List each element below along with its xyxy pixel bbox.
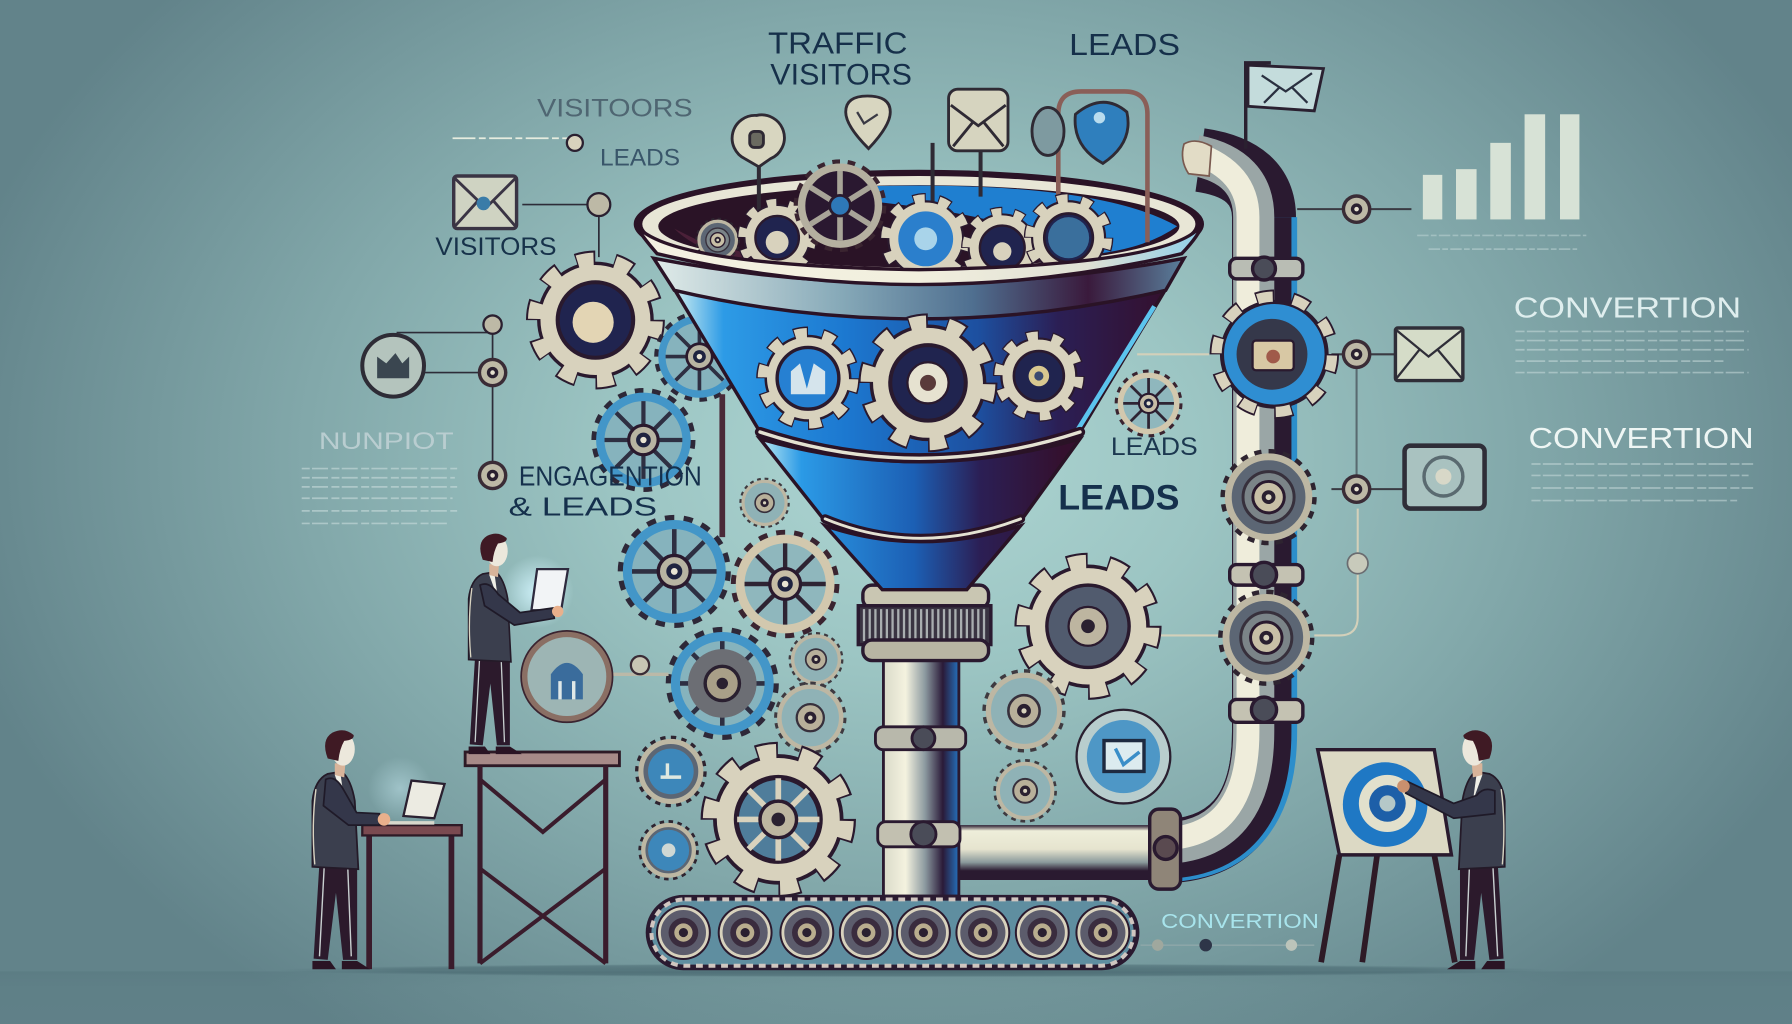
icon: shield bbox=[1032, 102, 1128, 163]
funnel bbox=[635, 91, 1202, 590]
icon: photo frame bbox=[1405, 446, 1485, 509]
right labels: CONVERTION bbox=[1514, 293, 1741, 325]
icon: envelope bbox=[949, 89, 1008, 151]
left labels: VISITORS bbox=[435, 233, 557, 261]
left labels: VISITOORS bbox=[537, 95, 693, 123]
right nodes bbox=[1342, 194, 1371, 574]
title labels top bbox=[768, 26, 1180, 92]
lens icon bbox=[521, 631, 669, 722]
icon: email box bbox=[454, 176, 517, 229]
left nodes bbox=[478, 135, 610, 490]
conveyor belt bbox=[646, 895, 1139, 970]
icons above funnel bbox=[732, 89, 1128, 167]
flag icon bbox=[1248, 65, 1323, 111]
vertical pipe under funnel bbox=[875, 651, 966, 896]
person on platform with laptop bbox=[469, 534, 574, 754]
left labels: & LEADS bbox=[509, 491, 657, 521]
funnel body lower bbox=[825, 526, 1021, 590]
gears in funnel bbox=[698, 164, 1107, 283]
gears right of funnel bbox=[986, 373, 1179, 820]
easel with target bbox=[1318, 750, 1455, 962]
conversion dots bbox=[1141, 939, 1314, 951]
neck collar bbox=[858, 585, 991, 661]
gears left of funnel bbox=[536, 261, 843, 877]
left labels: ENGAGENTION bbox=[519, 461, 702, 492]
desk with laptop bbox=[362, 757, 462, 969]
person at desk bbox=[312, 730, 390, 969]
left labels: NUNPIOT bbox=[319, 428, 454, 455]
presenting person bbox=[1397, 730, 1505, 969]
right labels: CONVERTION bbox=[1161, 910, 1319, 933]
faint chart caption bbox=[1417, 235, 1586, 249]
funnel rings bbox=[760, 432, 1080, 538]
title labels top: LEADS bbox=[1069, 27, 1180, 62]
icon stems bbox=[759, 91, 1147, 242]
gears on funnel bbox=[764, 324, 1078, 442]
title labels top: TRAFFIC bbox=[768, 26, 907, 61]
icon: location drop bbox=[846, 96, 890, 149]
pipe clamps bbox=[1150, 257, 1303, 889]
floor tint bbox=[0, 971, 1792, 1024]
bar chart bbox=[1423, 114, 1579, 219]
funnel interior bbox=[658, 185, 1179, 267]
funnel back rim bbox=[635, 171, 1202, 277]
right labels bbox=[1058, 293, 1754, 933]
left labels bbox=[319, 95, 702, 521]
large bottom wheel bbox=[712, 753, 845, 886]
faint right text blocks bbox=[1515, 331, 1753, 501]
funnel band bbox=[654, 258, 1184, 319]
faint left text block bbox=[302, 469, 457, 523]
right connectors bbox=[1137, 63, 1411, 635]
pipe bbox=[1160, 153, 1266, 851]
right labels: CONVERTION bbox=[1529, 423, 1754, 455]
right labels: LEADS bbox=[1111, 433, 1198, 461]
icon: round badge bbox=[362, 335, 424, 397]
left connectors bbox=[397, 138, 599, 475]
icon: envelope right bbox=[1395, 328, 1463, 381]
title labels top: VISITORS bbox=[770, 59, 912, 92]
right labels: LEADS bbox=[1058, 478, 1179, 518]
floor shadow bbox=[274, 963, 1554, 977]
horizontal pipe bbox=[949, 825, 1166, 880]
funnel front rim bbox=[635, 224, 1202, 285]
left labels: LEADS bbox=[600, 145, 680, 172]
gears on pipe bbox=[1219, 299, 1330, 681]
funnel body middle bbox=[760, 439, 1080, 537]
icon: pin bbox=[732, 115, 784, 167]
platform scaffold bbox=[465, 752, 619, 963]
pipe end cap bbox=[1182, 141, 1211, 176]
funnel edge highlight bbox=[1072, 306, 1154, 439]
funnel body upper bbox=[674, 289, 1166, 456]
